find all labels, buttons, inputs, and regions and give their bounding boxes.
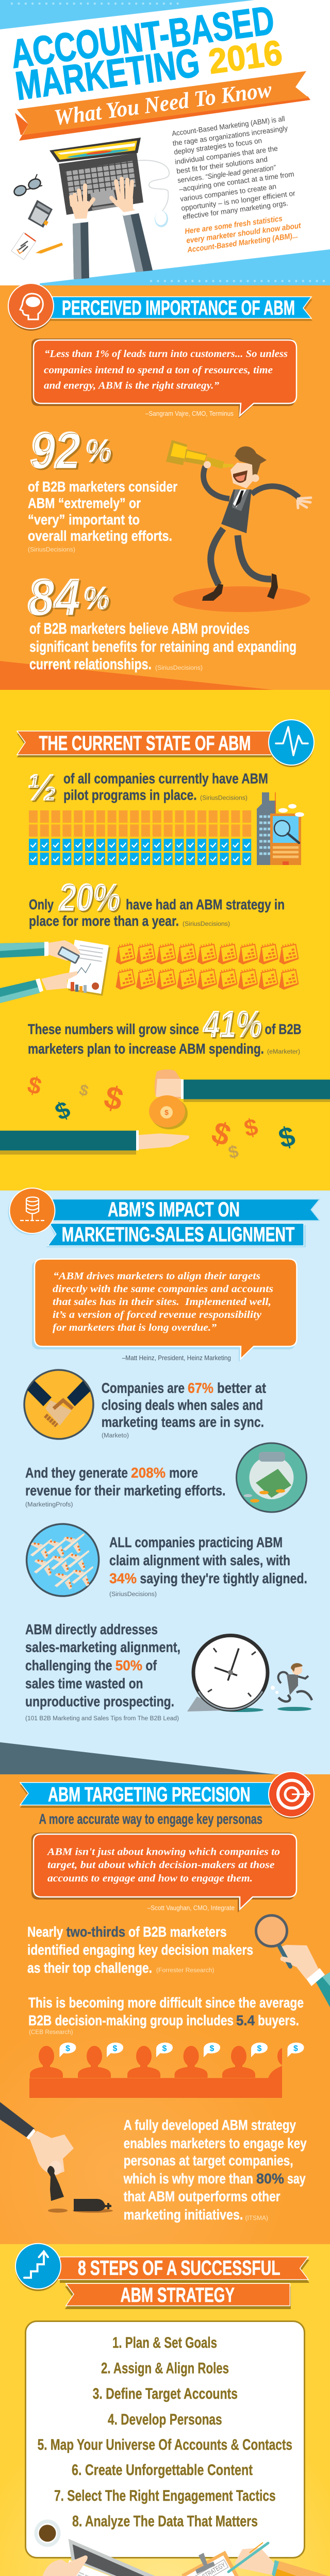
section: current state background <box>0 690 330 1191</box>
panel: eight steps list: 3. Define Target Accounts <box>93 2385 238 2402</box>
stat: only 20%: (SiriusDecisions) <box>183 921 230 927</box>
stat: 67% better: (Marketo) <box>102 1433 129 1439</box>
icon: stairs with arrow <box>15 2244 61 2291</box>
pictogram: buyer group <box>29 2043 304 2098</box>
stat: two-thirds: identified engaging key decision makers <box>27 1942 253 1958</box>
stat: only 20%: 20% <box>58 876 120 919</box>
stat: 92%: overall marketing efforts. <box>28 528 172 544</box>
intro text: Account-Based Marketing (ABM) is all <box>171 114 285 138</box>
stat: 34% aligned <box>109 1534 307 1598</box>
intro text: effective for many marketing orgs. <box>182 199 289 221</box>
icon: hands with report <box>0 940 110 1003</box>
section: header background <box>0 0 330 285</box>
stat: 92%: 92 <box>29 421 80 479</box>
stat: only 20% <box>29 876 285 929</box>
stat: 80% outperforms: marketing initiatives. <box>124 2207 243 2223</box>
section: marketing-sales alignment background <box>0 1191 330 1775</box>
intro text: opportunity – is no longer efficient or <box>180 189 296 212</box>
quote: Sangram Vajre: “Less than 1% of leads turn into customers... So unless <box>44 348 288 360</box>
stat: 67% better <box>102 1380 266 1439</box>
stat: 92%: (SiriusDecisions) <box>28 547 75 553</box>
stat: 67% better: better at <box>217 1380 266 1396</box>
stat: 92%: “very” important to <box>28 512 140 528</box>
heading: perceived importance of ABM <box>8 283 312 331</box>
stat: 50% sales time: unproductive prospecting. <box>25 1693 174 1709</box>
stat: 50% sales time: sales time wasted on <box>25 1675 143 1691</box>
icon: coffee cup <box>34 2519 61 2547</box>
icon: head with brain <box>8 283 54 331</box>
stat: one half <box>27 767 268 808</box>
stat: 34% aligned: 34% <box>109 1570 137 1586</box>
heading: ABM's impact on marketing-sales alignment <box>8 1188 320 1247</box>
stat: 50% sales time: ABM directly addresses <box>25 1621 158 1637</box>
stat: 41% spending: of B2B <box>265 1021 301 1037</box>
stat: 41% spending: (eMarketer) <box>267 1049 300 1055</box>
stat: 41% spending: marketers plan to increase ABM spending. <box>28 1041 264 1057</box>
icon: dollar signs: $ <box>25 1071 44 1100</box>
title: MARKETING <box>13 40 202 109</box>
stat: 5.4 buyers: buyers. <box>258 2012 299 2028</box>
stat: 80% outperforms: which is why more than <box>123 2171 253 2187</box>
panel: eight steps list: 4. Develop Personas <box>108 2411 222 2428</box>
stat: 5.4 buyers: (CEB Research) <box>29 2029 73 2036</box>
heading: ABM's impact on marketing-sales alignment: ABM’S IMPACT ON <box>108 1198 240 1221</box>
quote: Matt Heinz: “ABM drives marketers to align their targets <box>53 1270 260 1282</box>
stat: 50% sales time: of <box>145 1657 157 1673</box>
pictogram: calendars <box>116 943 298 990</box>
icon: hand toppling chess pieces <box>0 2102 113 2213</box>
icon: clock chasing businessman <box>187 1635 312 1712</box>
title: 2016 <box>206 33 285 81</box>
stat: 84%: % <box>83 581 109 616</box>
icon: dollar signs: $ <box>227 1142 240 1163</box>
icon: jar of money <box>236 1443 306 1512</box>
icon: dollar signs: $ <box>207 1115 235 1153</box>
stat: two-thirds: as their top challenge. <box>27 1960 152 1976</box>
stat: 208% revenue: 208% <box>131 1465 166 1481</box>
stat: 80% outperforms: personas at target companies, <box>124 2153 293 2168</box>
quote: Matt Heinz: that sales has in their sites. Implemented well, <box>53 1296 271 1308</box>
heading: the current state of ABM <box>17 720 314 767</box>
intro callout: Account-Based Marketing (ABM)... <box>186 231 299 255</box>
stat: 208% revenue: (MarketingProfs) <box>25 1502 73 1508</box>
intro callout: every marketer should know about <box>186 221 302 245</box>
quote: Matt Heinz: directly with the same companies and accounts <box>53 1283 273 1295</box>
stat: 80% outperforms: that ABM outperforms other <box>124 2189 280 2205</box>
stat: only 20%: place for more than a year. <box>29 913 179 929</box>
panel: eight steps list <box>26 2321 304 2557</box>
stat: 50% sales time: 50% <box>116 1657 142 1673</box>
stat: 34% aligned: claim alignment with sales, with <box>109 1552 290 1568</box>
heading: ABM targeting precision <box>20 1772 314 1819</box>
quote: Matt Heinz: it’s a version of forced revenue responsibility <box>53 1309 261 1320</box>
intro text: services. “Single-lead generation” <box>177 163 277 184</box>
stat: one half: of all companies currently have ABM <box>63 771 268 786</box>
section: targeting precision background <box>0 1774 330 2244</box>
icon: dollar signs <box>25 1071 299 1163</box>
icon: hand with magnifying glass <box>256 1916 330 2007</box>
stat: 34% aligned: ALL companies practicing ABM <box>109 1534 283 1550</box>
stat: 80% outperforms: 80% <box>256 2171 284 2187</box>
quote: Scott Vaughan: ABM isn't just about knowing which companies to <box>46 1846 280 1857</box>
stat: 84%: 84 <box>27 568 80 626</box>
icon: glasses <box>12 174 42 197</box>
stat: 50% sales time <box>25 1621 180 1722</box>
stat: one half: ½ <box>27 767 57 808</box>
stat: 67% better: Companies are <box>102 1380 185 1396</box>
intro callout: Here are some fresh statistics <box>184 214 283 236</box>
stat: 92% <box>28 421 177 553</box>
panel: eight steps list: 8. Analyze The Data That Matters <box>72 2513 258 2530</box>
section: eight steps background <box>0 2244 330 2576</box>
quote: Scott Vaughan: target, but about which decision-makers at those <box>47 1859 275 1871</box>
quote: Sangram Vajre: and energy, ABM is the right strategy.” <box>44 380 219 392</box>
quote: Matt Heinz: for marketers that is long overdue.” <box>53 1322 217 1333</box>
stat: 41% spending: These numbers will grow since <box>28 1021 199 1037</box>
stat: 92%: of B2B marketers consider <box>28 479 177 495</box>
stat: 5.4 buyers: 5.4 <box>236 2012 255 2028</box>
stat: 67% better: closing deals when sales and <box>102 1397 263 1413</box>
stat: 41% spending <box>28 1004 301 1057</box>
stat: 50% sales time: (101 B2B Marketing and Sales Tips from The B2B Lead) <box>25 1716 179 1722</box>
icon: dollar signs: $ <box>275 1121 299 1154</box>
stat: two-thirds: of B2B marketers <box>128 1924 227 1940</box>
quote: Sangram Vajre <box>31 338 296 418</box>
stat: 80% outperforms: (ITSMA) <box>245 2215 268 2222</box>
stat: one half: pilot programs in place. <box>63 787 197 803</box>
stat: only 20%: have had an ABM strategy in <box>126 896 285 912</box>
quote: Sangram Vajre: –Sangram Vajre, CMO, Terminus <box>145 410 234 417</box>
icon: laptop on desk with hands <box>0 2539 178 2576</box>
icon: dollar signs: $ <box>101 1079 127 1118</box>
stat: only 20%: Only <box>29 896 54 912</box>
quote: Sangram Vajre: companies intend to spend a ton of resources, time <box>44 365 273 376</box>
icon: pulse line <box>269 720 314 767</box>
icon: calculator <box>28 200 53 228</box>
icon: dollar signs: $ <box>77 1081 90 1100</box>
stat: 50% sales time: sales-marketing alignment, <box>25 1639 180 1655</box>
stat: 84% <box>27 568 296 673</box>
stat: 92%: ABM “extremely” or <box>28 495 141 511</box>
intro text: individual companies that are the <box>174 144 278 166</box>
stat: 80% outperforms: say <box>287 2171 306 2187</box>
stat: 208% revenue: And they generate <box>25 1465 128 1481</box>
heading: 8 steps of a successful ABM strategy: ABM STRATEGY <box>121 2284 235 2307</box>
intro callout <box>184 214 302 255</box>
pictogram: company squares <box>29 810 254 865</box>
heading: 8 steps of a successful ABM strategy <box>15 2244 309 2309</box>
stat: 80% outperforms <box>123 2117 307 2223</box>
stat: 5.4 buyers: B2B decision-making group includes <box>28 2012 234 2028</box>
subtitle ribbon <box>15 71 310 141</box>
icon: notepad and pencil <box>11 232 63 260</box>
subtitle ribbon: What You Need To Know <box>53 77 273 130</box>
stat: 84%: (SiriusDecisions) <box>155 665 203 671</box>
icon: database <box>8 1188 55 1235</box>
stat: two-thirds <box>27 1924 253 1976</box>
stat: 84%: current relationships. <box>29 656 152 673</box>
stat: 67% better: 67% <box>188 1380 213 1396</box>
quote: Matt Heinz: –Matt Heinz, President, Heinz Marketing <box>122 1354 231 1362</box>
icon: man with telescope <box>166 440 311 612</box>
icon: laptop with typing hands <box>50 138 169 279</box>
stat: two-thirds: two-thirds <box>67 1924 125 1940</box>
panel: eight steps list: 2. Assign & Align Roles <box>101 2360 229 2377</box>
intro text: various companies to create an <box>179 182 277 203</box>
title <box>8 0 285 109</box>
stat: 34% aligned: (SiriusDecisions) <box>109 1591 157 1598</box>
stat: 5.4 buyers <box>28 1994 304 2036</box>
stat: 50% sales time: challenging the <box>25 1657 112 1673</box>
stat: 84%: of B2B marketers believe ABM provides <box>29 620 250 637</box>
intro text: the rage as organizations increasingly <box>172 124 288 147</box>
stat: 208% revenue: more <box>169 1465 198 1481</box>
quote: Scott Vaughan: –Scott Vaughan, CMO, Integrate <box>147 1904 235 1912</box>
quote: Scott Vaughan: accounts to engage and how to engage them. <box>47 1873 253 1884</box>
icon: handshake <box>24 1370 93 1439</box>
icon: clipboard with ABM strategy form <box>182 2543 330 2576</box>
intro text: deploy strategies to focus on <box>173 136 262 156</box>
stat: two-thirds: Nearly <box>27 1924 63 1940</box>
icon: target with arrow <box>269 1772 314 1819</box>
quote: Scott Vaughan <box>31 1833 296 1912</box>
icon: hands passing money bag <box>0 1070 330 1155</box>
icon: planes in formation <box>27 1524 99 1596</box>
icon: hands passing money bag: $ <box>164 1108 169 1116</box>
panel: eight steps list: 1. Plan & Set Goals <box>112 2334 217 2351</box>
stat: two-thirds: (Forrester Research) <box>156 1968 214 1974</box>
panel: eight steps list: 6. Create Unforgettable Content <box>72 2462 253 2479</box>
section: perceived importance background <box>0 285 330 690</box>
intro text: best fit for their solutions and <box>176 155 268 175</box>
intro text <box>171 114 296 221</box>
icon: dollar signs: $ <box>51 1096 74 1125</box>
stat: 41% spending: 41% <box>202 1004 262 1045</box>
stat: one half: (SiriusDecisions) <box>200 795 248 802</box>
intro text: –acquiring one contact at a time from <box>178 170 294 193</box>
icon: dollar signs: $ <box>242 1113 260 1142</box>
stat: 208% revenue <box>25 1465 226 1508</box>
stat: 208% revenue: revenue for their marketing efforts. <box>25 1483 226 1499</box>
stat: 92%: % <box>85 433 111 469</box>
icon: buildings with magnifier <box>257 792 304 865</box>
quote: Matt Heinz <box>32 1259 297 1362</box>
stat: 67% better: marketing teams are in sync. <box>102 1414 264 1430</box>
